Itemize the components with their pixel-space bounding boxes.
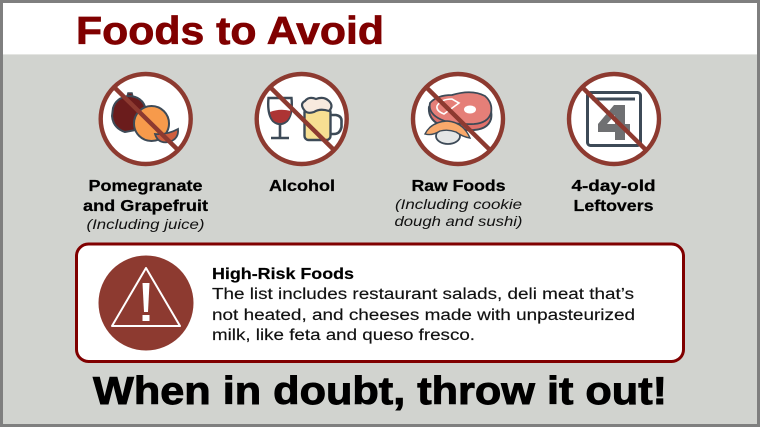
slogan: When in doubt, throw it out! [93, 370, 667, 413]
text: high-risk foods body: not heated, and cheeses made with unpasteurized [212, 307, 635, 324]
text: high-risk foods body: milk, like feta and queso fresco. [212, 327, 475, 344]
icon: wine and beer prohibited [257, 74, 347, 164]
panel: high-risk foods [76, 244, 684, 362]
label: raw foods: Raw Foods [412, 178, 506, 195]
label: leftovers [572, 178, 656, 215]
text: high-risk foods body [212, 286, 635, 344]
label: pomegranate and grapefruit: and Grapefruit [83, 198, 208, 215]
label: pomegranate and grapefruit: (Including juice) [86, 216, 204, 232]
icon: pomegranate and grapefruit prohibited [101, 74, 191, 164]
label: leftovers: 4-day-old [572, 178, 656, 195]
text: high-risk foods heading: High-Risk Foods [212, 266, 354, 283]
label: raw foods: dough and sushi) [394, 213, 522, 229]
label: raw foods [394, 178, 522, 229]
label: leftovers: Leftovers [574, 198, 654, 215]
label: pomegranate and grapefruit: Pomegranate [88, 178, 203, 195]
title: Foods to Avoid [76, 10, 384, 53]
text: high-risk foods body: The list includes restaurant salads, deli meat that’s [212, 286, 634, 303]
label: alcohol: Alcohol [269, 178, 335, 195]
label: raw foods: (Including cookie [395, 196, 522, 212]
header band [3, 3, 757, 54]
icon: warning triangle [98, 256, 194, 350]
icon: raw foods prohibited [413, 74, 503, 164]
label: pomegranate and grapefruit [83, 178, 208, 232]
icon: calendar day four prohibited [569, 74, 659, 164]
